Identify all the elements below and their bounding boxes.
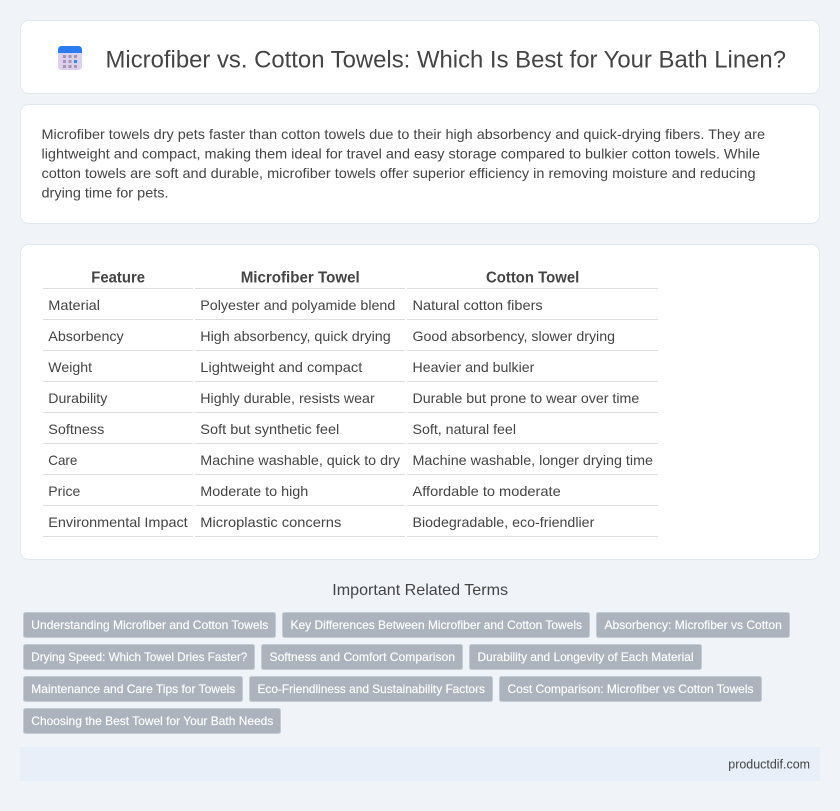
tag: Key Differences Between Microfiber and Cotton Towels (290, 618, 582, 632)
table row: environmental impact (48, 514, 595, 530)
text block: introduction paragraph: drying time for pets. (42, 184, 168, 200)
tag: Drying Speed: Which Towel Dries Faster? (31, 650, 248, 664)
table row: absorbency: Good absorbency, slower drying (412, 328, 615, 344)
table row: price: Affordable to moderate (412, 483, 561, 499)
table header row (91, 270, 579, 287)
title: Microfiber vs. Cotton Towels: Which Is Best for Your Bath Linen? (106, 46, 786, 74)
table row: weight: Weight (48, 359, 92, 375)
table row: durability: Durability (48, 390, 107, 406)
table row: softness: Soft but synthetic feel (200, 421, 339, 437)
text block: introduction paragraph (42, 126, 765, 200)
table row: material: Material (48, 297, 100, 313)
table row: durability: Highly durable, resists wear (200, 390, 375, 406)
tag (24, 708, 280, 734)
table row: price (48, 483, 561, 499)
table row: absorbency (48, 328, 615, 344)
table row: environmental impact: Biodegradable, eco-friendlier (412, 514, 595, 530)
table row: environmental impact: Environmental Impact (48, 514, 188, 530)
table row: absorbency: Absorbency (48, 328, 124, 344)
table header row: Microfiber Towel (241, 270, 360, 287)
tag group: related terms (24, 612, 790, 734)
table row: material (48, 297, 543, 313)
panel: title header (20, 20, 820, 94)
table header row: Cotton Towel (486, 270, 579, 287)
table row: price: Moderate to high (200, 483, 308, 499)
table row: material: Natural cotton fibers (412, 297, 543, 313)
heading: important related terms: Important Related Terms (332, 582, 508, 599)
table row: softness (48, 421, 516, 437)
table row: durability (48, 390, 640, 406)
tag (24, 644, 254, 670)
table header row: Feature (91, 270, 145, 287)
table row: softness: Soft, natural feel (412, 421, 516, 437)
tag (250, 676, 492, 702)
tag: Durability and Longevity of Each Material (478, 650, 694, 664)
tag (500, 676, 762, 702)
tag (24, 676, 242, 702)
footer (20, 747, 820, 781)
text block: introduction paragraph: lightweight and compact, making them ideal for travel and easy storage compared to bulkier cotton towels. While (42, 146, 760, 162)
table row: environmental impact: Microplastic concerns (200, 514, 341, 530)
tag (262, 644, 462, 670)
table row: softness: Softness (48, 421, 104, 437)
panel: comparison table (20, 244, 820, 560)
table row: care: Care (48, 452, 77, 468)
tag: Eco-Friendliness and Sustainability Factors (258, 682, 485, 696)
tag (282, 612, 590, 638)
table row: care: Machine washable, longer drying time (412, 452, 653, 468)
table row: weight (48, 359, 535, 375)
table row: price: Price (48, 483, 81, 499)
table row: material: Polyester and polyamide blend (200, 297, 395, 313)
table row: weight: Heavier and bulkier (412, 359, 535, 375)
tag: Understanding Microfiber and Cotton Towels (31, 618, 268, 632)
text block: introduction paragraph: Microfiber towels dry pets faster than cotton towels due to their high absorbency and quick-drying fibers. They are (42, 126, 765, 142)
tag: Maintenance and Care Tips for Towels (31, 682, 235, 696)
table row: absorbency: High absorbency, quick drying (200, 328, 391, 344)
tag: Softness and Comfort Comparison (270, 650, 455, 664)
table row: care: Machine washable, quick to dry (200, 452, 400, 468)
footer source text: productdif.com (728, 757, 810, 771)
tag: Absorbency: Microfiber vs Cotton (604, 618, 782, 632)
table rules (43, 288, 658, 537)
tag: Choosing the Best Towel for Your Bath Needs (31, 714, 273, 728)
tag (24, 612, 276, 638)
table row: care (48, 452, 653, 468)
table row: weight: Lightweight and compact (200, 359, 362, 375)
panel: introduction (20, 104, 820, 224)
text block: introduction paragraph: cotton towels are soft and durable, microfiber towels offer superior efficiency in removing moisture and reducing (42, 165, 756, 181)
tag: Cost Comparison: Microfiber vs Cotton Towels (508, 682, 754, 696)
tag (596, 612, 790, 638)
tag (470, 644, 702, 670)
icon: calendar (58, 46, 82, 70)
table row: durability: Durable but prone to wear over time (412, 390, 640, 406)
